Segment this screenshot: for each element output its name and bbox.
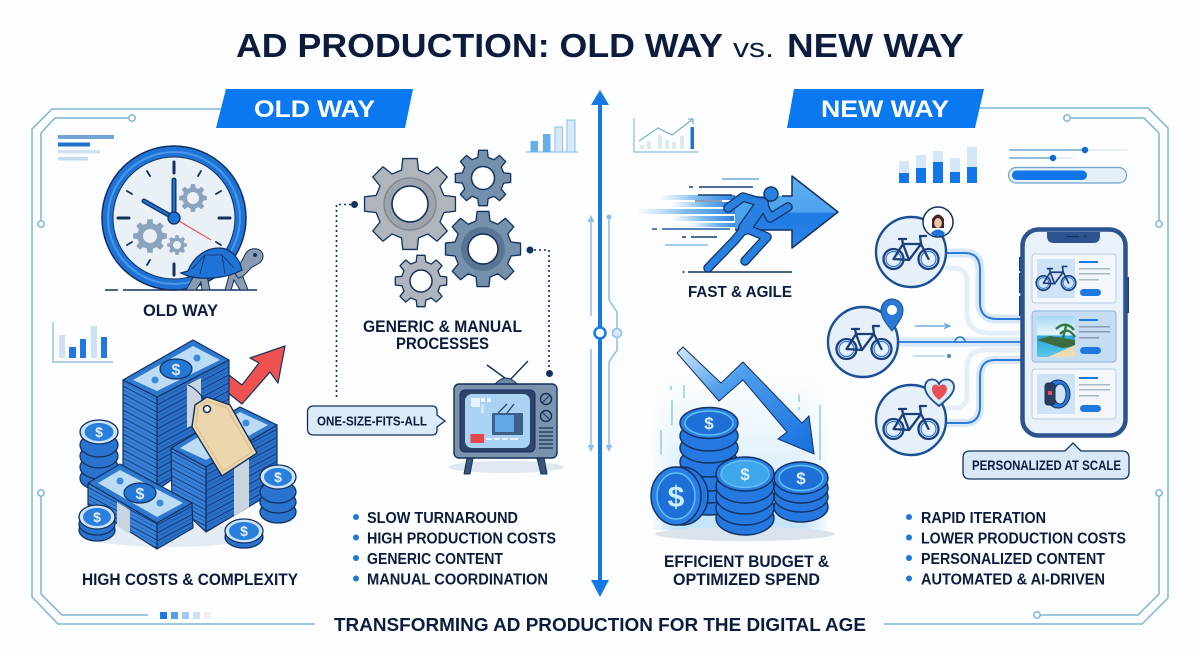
connectors: bikes to phone: [897, 253, 1022, 423]
list: new way: AUTOMATED & AI-DRIVEN: [921, 572, 1105, 588]
coin stack back: [680, 408, 738, 515]
list: old way: HIGH PRODUCTION COSTS: [367, 530, 556, 548]
title: vs.: [733, 33, 774, 63]
title: AD PRODUCTION: OLD WAY: [236, 27, 723, 64]
icon: television: [448, 361, 564, 474]
label: efficient budget: OPTIMIZED SPEND: [673, 571, 820, 589]
list: old way: SLOW TURNAROUND: [367, 510, 518, 527]
icon: money stacks with price tag: $: [136, 486, 145, 503]
card: beach: [1032, 311, 1116, 362]
callout: one size fits all: ONE-SIZE-FITS-ALL: [317, 414, 427, 428]
label: generic and manual processes: PROCESSES: [396, 335, 489, 353]
icon: money stacks with price tag: $: [274, 469, 282, 485]
label: efficient budget: EFFICIENT BUDGET &: [664, 553, 829, 571]
runner figure: [708, 197, 788, 268]
coin stack right: [774, 462, 828, 522]
progress squares: [160, 612, 211, 619]
label: high costs: HIGH COSTS & COMPLEXITY: [82, 570, 299, 589]
tilted coin: [651, 467, 708, 525]
label: fast and agile: FAST & AGILE: [688, 284, 792, 301]
bike circle: person: [876, 207, 953, 287]
coin stack: front left: [79, 505, 115, 541]
list: old way: MANUAL COORDINATION: [367, 572, 548, 588]
dotted connector right: [526, 246, 553, 377]
stack: back tall: [123, 340, 229, 490]
icon: coins with down arrow: $: [704, 414, 714, 433]
label: old way: OLD WAY: [143, 302, 218, 320]
label: generic and manual processes: [363, 318, 522, 353]
list: new way: LOWER PRODUCTION COSTS: [921, 530, 1126, 548]
coin stack middle: [716, 457, 774, 535]
icon: gears: [365, 150, 521, 307]
icon: clock with turtle: [102, 146, 263, 290]
small bar chart: [526, 120, 578, 152]
bike circle: location: [828, 299, 903, 377]
badge: old way: [216, 89, 413, 128]
coin stack: left: [80, 420, 118, 490]
label: generic and manual processes: GENERIC & MANUAL: [363, 318, 522, 336]
list: new way: PERSONALIZED CONTENT: [921, 551, 1105, 568]
coin: front centre: [225, 519, 263, 548]
document lines: [58, 135, 114, 160]
icon: coins with down arrow: $: [668, 481, 685, 514]
callout: personalized at scale: PERSONALIZED AT SCALE: [972, 457, 1121, 473]
callout: one size fits all: [308, 406, 445, 435]
stack: right: [171, 407, 277, 532]
price tag: [188, 385, 207, 405]
icon: money stacks with price tag: [79, 340, 296, 549]
sliders and progress bar: [1008, 147, 1127, 183]
red arrow: [222, 346, 285, 404]
circuit frame right: [884, 108, 1168, 624]
panel: old way: [53, 120, 578, 589]
stacked bar chart: [899, 147, 977, 183]
icon: runner with arrow: [637, 176, 838, 273]
mini bar chart: [53, 322, 113, 362]
icon: coins with down arrow: [650, 347, 835, 541]
list: new way: RAPID ITERATION: [921, 510, 1046, 527]
badge: new way: NEW WAY: [821, 96, 949, 123]
footer caption: TRANSFORMING AD PRODUCTION FOR THE DIGITAL AGE: [334, 615, 866, 635]
icon: coins with down arrow: $: [796, 469, 806, 488]
icon: money stacks with price tag: $: [95, 424, 103, 440]
card: bike: [1032, 254, 1116, 303]
badge: old way: OLD WAY: [254, 96, 375, 123]
central divider arrow: [588, 90, 622, 597]
title: NEW WAY: [787, 27, 964, 64]
bike circle: heart: [876, 379, 954, 455]
icon: money stacks with price tag: $: [240, 523, 248, 539]
badge: new way: [787, 89, 984, 128]
icon: coins with down arrow: $: [740, 465, 750, 484]
label: efficient budget: [664, 553, 829, 589]
coin stack: right: [260, 465, 296, 523]
dotted connector left: [336, 201, 358, 400]
circuit frame left: [32, 109, 315, 624]
card: smartwatch: [1032, 369, 1116, 419]
icon: money stacks with price tag: $: [172, 362, 181, 379]
title: [236, 27, 964, 64]
list: old way: [353, 510, 556, 588]
list: old way: GENERIC CONTENT: [367, 551, 503, 568]
phone: [1019, 230, 1129, 436]
stack: front: [88, 464, 193, 549]
icon: money stacks with price tag: $: [93, 509, 101, 525]
list: new way: [906, 510, 1126, 588]
panel: new way: [634, 118, 1129, 589]
mini line chart: [634, 118, 698, 152]
callout: personalized at scale: [963, 443, 1129, 479]
